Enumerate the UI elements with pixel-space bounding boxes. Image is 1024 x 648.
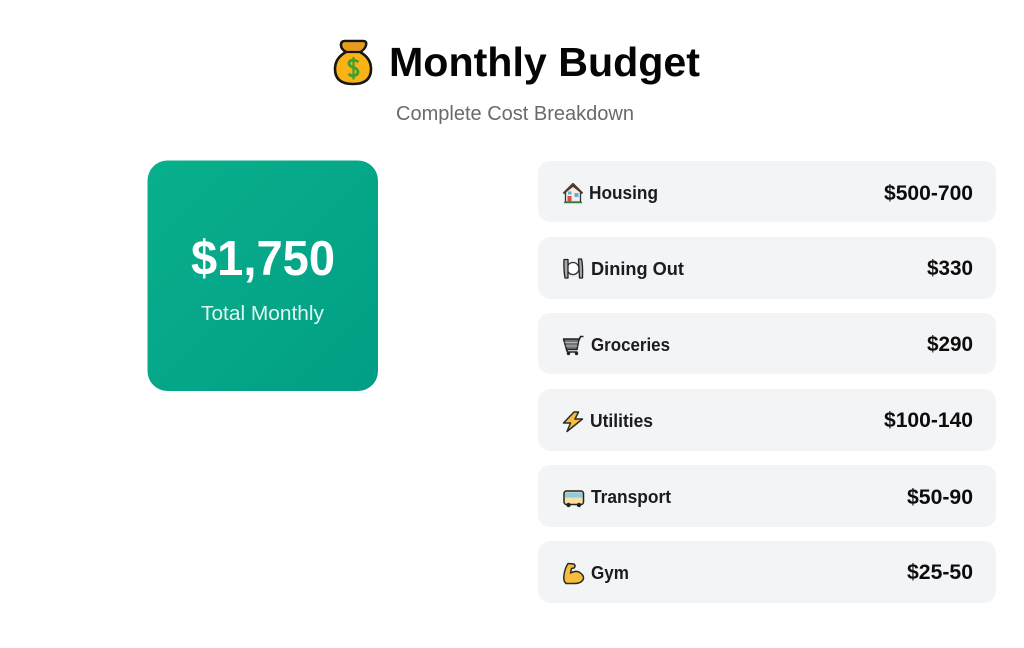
value: $50-90 bbox=[907, 485, 973, 509]
row: gym bbox=[538, 541, 996, 603]
panel: total monthly card bbox=[148, 160, 378, 391]
icon: money bag bbox=[335, 41, 371, 84]
icon: shopping cart bbox=[564, 336, 584, 355]
row: groceries bbox=[538, 313, 996, 374]
value: $100-140 bbox=[884, 408, 973, 432]
title: Monthly Budget bbox=[389, 39, 700, 85]
value: $25-50 bbox=[907, 560, 973, 584]
icon: flexed biceps bbox=[564, 564, 584, 584]
value: $290 bbox=[927, 332, 973, 356]
row: dining out bbox=[538, 237, 996, 299]
row: utilities bbox=[538, 389, 996, 451]
icon: lightning bolt bbox=[564, 412, 582, 432]
label: Housing bbox=[589, 182, 658, 203]
value: $330 bbox=[927, 256, 973, 280]
label: Transport bbox=[591, 486, 671, 507]
total amount: $1,750 bbox=[191, 232, 335, 286]
icon: bus bbox=[564, 491, 584, 507]
icon: house bbox=[564, 184, 582, 202]
value: $500-700 bbox=[884, 181, 973, 205]
total label: Total Monthly bbox=[201, 302, 325, 325]
row: housing bbox=[538, 161, 996, 222]
icon: plate and cutlery bbox=[564, 259, 583, 278]
subtitle: Complete Cost Breakdown bbox=[396, 102, 634, 125]
label: Utilities bbox=[590, 410, 653, 431]
label: Groceries bbox=[591, 334, 670, 355]
row: transport bbox=[538, 465, 996, 527]
label: Gym bbox=[591, 562, 629, 583]
label: Dining Out bbox=[591, 258, 684, 279]
